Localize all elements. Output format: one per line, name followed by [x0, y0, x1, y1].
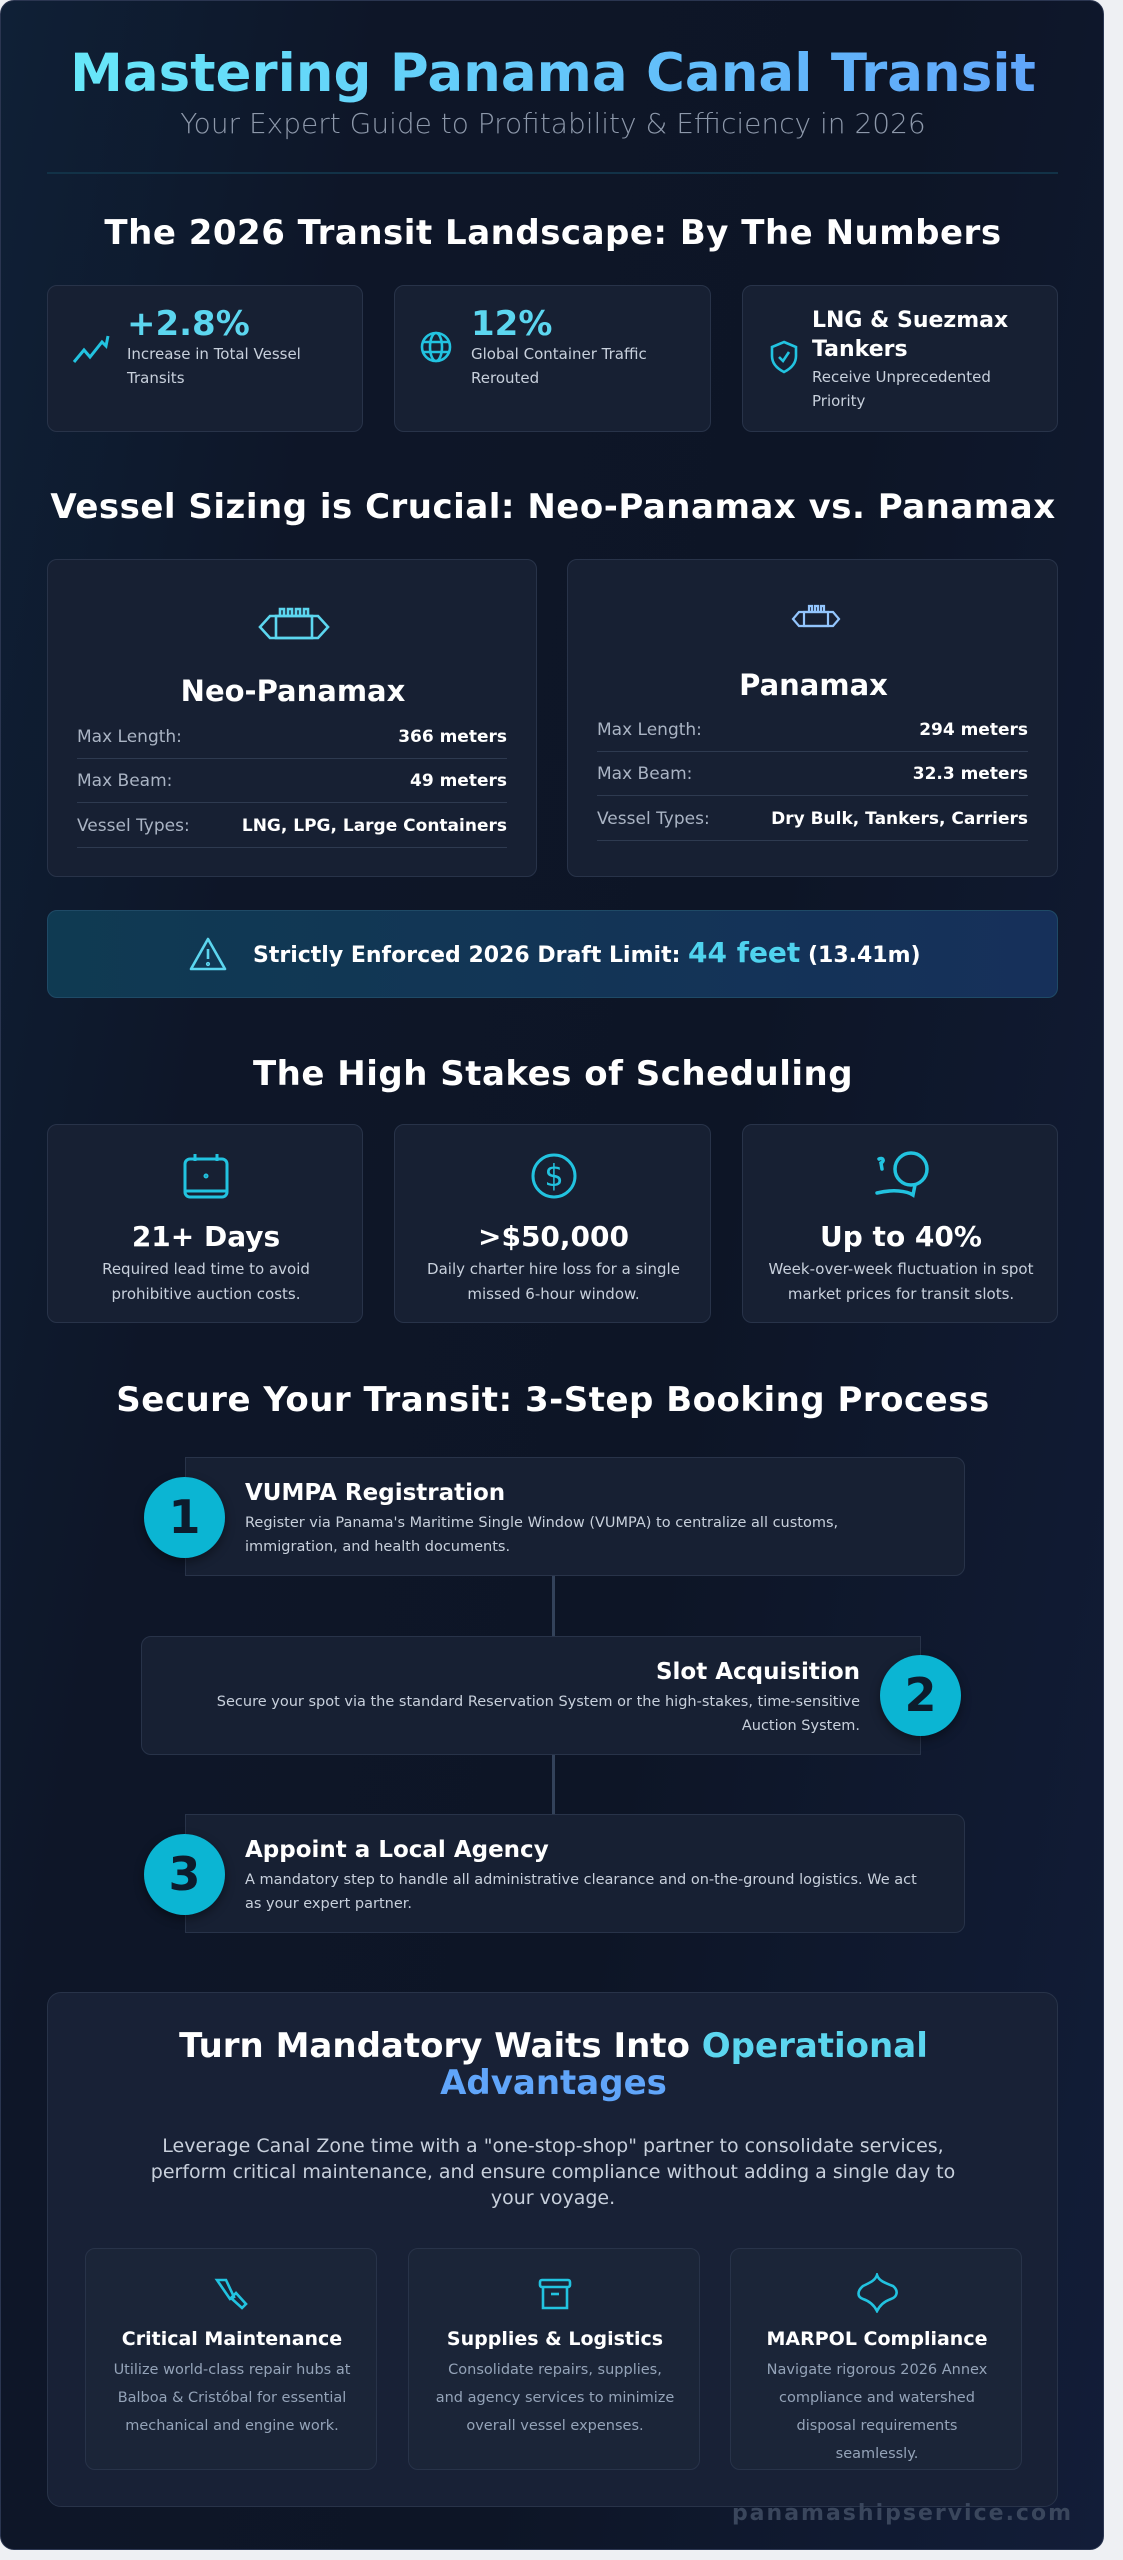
step 1: immigration, and health documents. [245, 1539, 510, 1555]
subcard: supplies [408, 2248, 700, 2470]
panel: operational advantages [47, 1992, 1058, 2507]
stat card: lead time [47, 1124, 363, 1323]
icon: dollar: $ [544, 1159, 564, 1194]
subcard: maintenance: Critical Maintenance [122, 2328, 342, 2350]
heading: booking process: Secure Your Transit: 3-Step Booking Process [116, 1380, 990, 1420]
step 2: Secure your spot via the standard Reservation System or the high-stakes, time-sensitive Auction System. [217, 1694, 860, 1734]
stat card: vessel transits [47, 285, 363, 432]
intro paragraph [151, 2135, 955, 2209]
panel: Panamax: 32.3 meters [913, 764, 1028, 784]
heading: Advantages [440, 2063, 667, 2103]
title: Mastering Panama Canal Transit [70, 43, 1036, 104]
icon: large ship [258, 608, 330, 640]
heading [179, 2026, 928, 2103]
panel: Neo-Panamax: 366 meters [398, 726, 507, 746]
stat card: LNG priority [742, 285, 1058, 432]
badge 2: 2 [904, 1668, 936, 1722]
icon: fluctuation [875, 1151, 929, 1198]
stat card: lead time: 21+ Days [132, 1220, 280, 1253]
panel: Panamax: Vessel Types: [597, 808, 710, 828]
panel: Panamax: Panamax [739, 668, 888, 702]
stat card: charter loss: >$50,000 [478, 1220, 629, 1253]
intro paragraph: your voyage. [491, 2187, 615, 2209]
stat card: vessel transits: Increase in Total Vessel Transits [127, 345, 301, 387]
panel: Neo-Panamax: Max Length: [77, 726, 182, 746]
panel: Panamax: Max Length: [597, 720, 702, 740]
stat card: LNG priority: LNG & Suezmax Tankers [812, 308, 1008, 362]
icon: dollar [532, 1154, 576, 1198]
watermark: panamashipservice.com [732, 2501, 1073, 2526]
step 3 [185, 1814, 965, 1933]
panel: Neo-Panamax: 49 meters [410, 770, 507, 790]
subcard: supplies: Supplies & Logistics [447, 2328, 663, 2350]
connector line [552, 1576, 555, 1814]
stat card: container traffic: Global Container Traffic Rerouted [471, 345, 647, 387]
icon: globe [420, 332, 452, 362]
icon: small ship [792, 604, 840, 628]
stat card: price fluctuation: Week-over-week fluctuation in spot market prices for transit slots. [768, 1260, 1034, 1303]
badge 3: 3 [168, 1847, 200, 1901]
callout: draft limit: Strictly Enforced 2026 Draft Limit: 44 feet (13.41m) [253, 936, 921, 969]
callout: draft limit [47, 910, 1058, 998]
icon: tool [214, 2278, 248, 2310]
subcard: MARPOL [730, 2248, 1022, 2470]
panel: Panamax: Dry Bulk, Tankers, Carriers [771, 808, 1028, 828]
step 2: Slot Acquisition [656, 1659, 860, 1685]
subcard: maintenance [85, 2248, 377, 2470]
step 3: as your expert partner. [245, 1896, 412, 1912]
panel: Neo-Panamax: Neo-Panamax [181, 674, 405, 708]
subtitle: Your Expert Guide to Profitability & Efficiency in 2026 [180, 107, 926, 140]
icon: trend line [72, 336, 110, 363]
panel: Neo-Panamax: LNG, LPG, Large Containers [242, 816, 507, 836]
panel: Neo-Panamax: Vessel Types: [77, 816, 190, 836]
intro paragraph: Leverage Canal Zone time with a "one-stop-shop" partner to consolidate services, [162, 2135, 944, 2157]
step 1: Register via Panama's Maritime Single Window (VUMPA) to centralize all customs, [245, 1515, 838, 1531]
panel: Panamax: 294 meters [919, 720, 1028, 740]
icon: box [538, 2278, 572, 2310]
intro paragraph: perform critical maintenance, and ensure compliance without adding a single day to [151, 2161, 955, 2183]
stat card: charter loss [394, 1124, 711, 1323]
icon: warning [190, 938, 226, 970]
icon: compliance [857, 2273, 898, 2313]
stat card: vessel transits: +2.8% [127, 304, 250, 344]
panel: Panamax: Max Beam: [597, 764, 692, 784]
step 1 [185, 1457, 965, 1576]
panel: Neo-Panamax [47, 559, 537, 877]
icon: shield [770, 340, 798, 374]
subcard: supplies: Consolidate repairs, supplies, and agency services to minimize overall vessel expenses. [436, 2362, 674, 2434]
badge 3 [144, 1834, 225, 1915]
stat card: container traffic: 12% [471, 304, 552, 344]
subcard: maintenance: Utilize world-class repair hubs at Balboa & Cristóbal for essential mechanical and engine work. [114, 2362, 350, 2434]
stat card: price fluctuation [742, 1124, 1058, 1323]
step 2 [141, 1636, 921, 1755]
badge 1 [144, 1477, 225, 1558]
heading: high stakes: The High Stakes of Scheduling [253, 1054, 853, 1094]
panel: Panamax [567, 559, 1058, 877]
step 3: A mandatory step to handle all administrative clearance and on-the-ground logistics. We act [245, 1872, 917, 1888]
icon: calendar [184, 1154, 228, 1198]
badge 1: 1 [168, 1490, 200, 1544]
badge 2 [880, 1655, 961, 1736]
step 1: VUMPA Registration [245, 1480, 505, 1506]
stat card: lead time: Required lead time to avoid prohibitive auction costs. [102, 1260, 310, 1303]
subcard: MARPOL: Navigate rigorous 2026 Annex compliance and watershed disposal requirements seamlessly. [767, 2362, 987, 2462]
stat card: LNG priority: Receive Unprecedented Priority [812, 368, 991, 410]
panel: Neo-Panamax: Max Beam: [77, 770, 172, 790]
stat card: price fluctuation: Up to 40% [820, 1220, 982, 1253]
subcard: MARPOL: MARPOL Compliance [767, 2328, 987, 2350]
heading: Turn Mandatory Waits Into Operational [179, 2026, 928, 2066]
stat card: container traffic [394, 285, 711, 432]
heading: transit landscape: The 2026 Transit Landscape: By The Numbers [104, 213, 1002, 253]
heading: vessel sizing: Vessel Sizing is Crucial: Neo-Panamax vs. Panamax [50, 487, 1056, 527]
stat card: charter loss: Daily charter hire loss for a single missed 6-hour window. [427, 1260, 680, 1303]
step 3: Appoint a Local Agency [245, 1837, 549, 1863]
